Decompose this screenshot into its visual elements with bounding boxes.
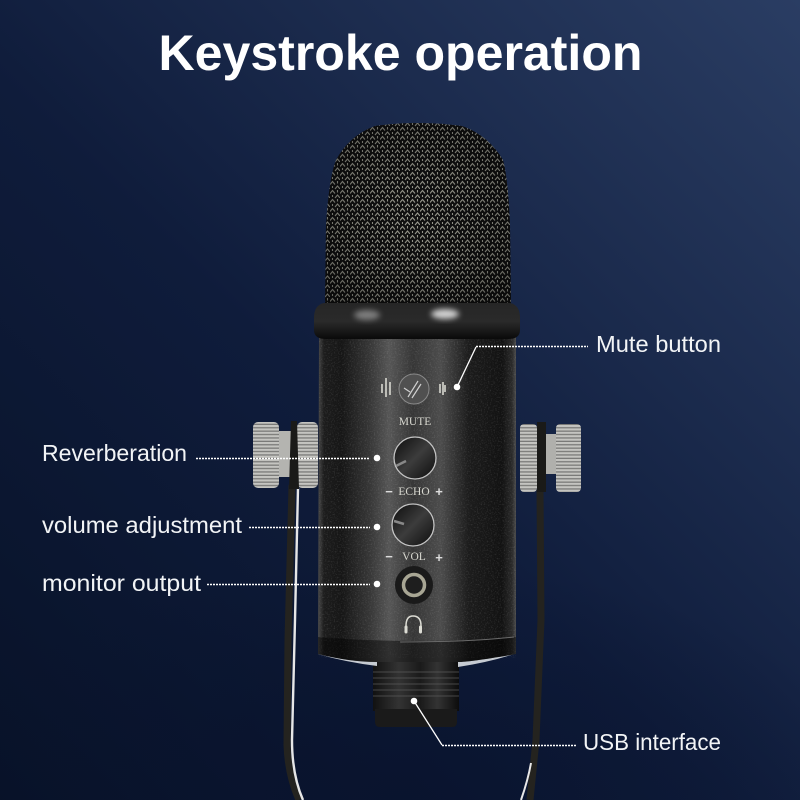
callout: mute button: Mute button xyxy=(596,331,721,357)
lower body highlights xyxy=(318,652,514,667)
mesh grille head xyxy=(325,123,511,305)
ECHO label xyxy=(385,484,443,499)
ECHO label: − xyxy=(385,484,393,499)
echo knob xyxy=(394,437,436,479)
callout: USB interface xyxy=(411,698,721,755)
left thumb screw xyxy=(253,421,318,489)
callout: mute button xyxy=(454,331,721,390)
VOL label xyxy=(385,549,443,565)
icon: headphones xyxy=(406,616,421,632)
callout: volume adjustment: volume adjustment xyxy=(42,512,243,538)
right thumb screw xyxy=(520,422,581,492)
body cylinder xyxy=(318,336,516,662)
microphone xyxy=(253,123,581,727)
ECHO label: ECHO xyxy=(398,486,430,498)
mute control icons xyxy=(382,374,445,404)
collar ring xyxy=(314,303,520,339)
MUTE label: MUTE xyxy=(399,416,431,428)
callout: USB interface: USB interface xyxy=(583,729,721,755)
callout: volume adjustment xyxy=(42,512,380,538)
volume knob xyxy=(392,504,434,546)
VOL label: VOL xyxy=(402,551,426,563)
callout: reverberation xyxy=(42,440,380,466)
callout: monitor output: monitor output xyxy=(42,570,202,596)
VOL label: + xyxy=(435,550,443,565)
headphone jack xyxy=(395,566,433,604)
VOL label: − xyxy=(385,549,393,564)
title: Keystroke operation xyxy=(158,25,642,81)
threaded USB connector xyxy=(373,655,459,727)
ECHO label: + xyxy=(435,484,443,499)
callout: reverberation: Reverberation xyxy=(42,440,187,466)
callout: monitor output xyxy=(42,570,380,596)
yoke wires xyxy=(287,485,541,800)
